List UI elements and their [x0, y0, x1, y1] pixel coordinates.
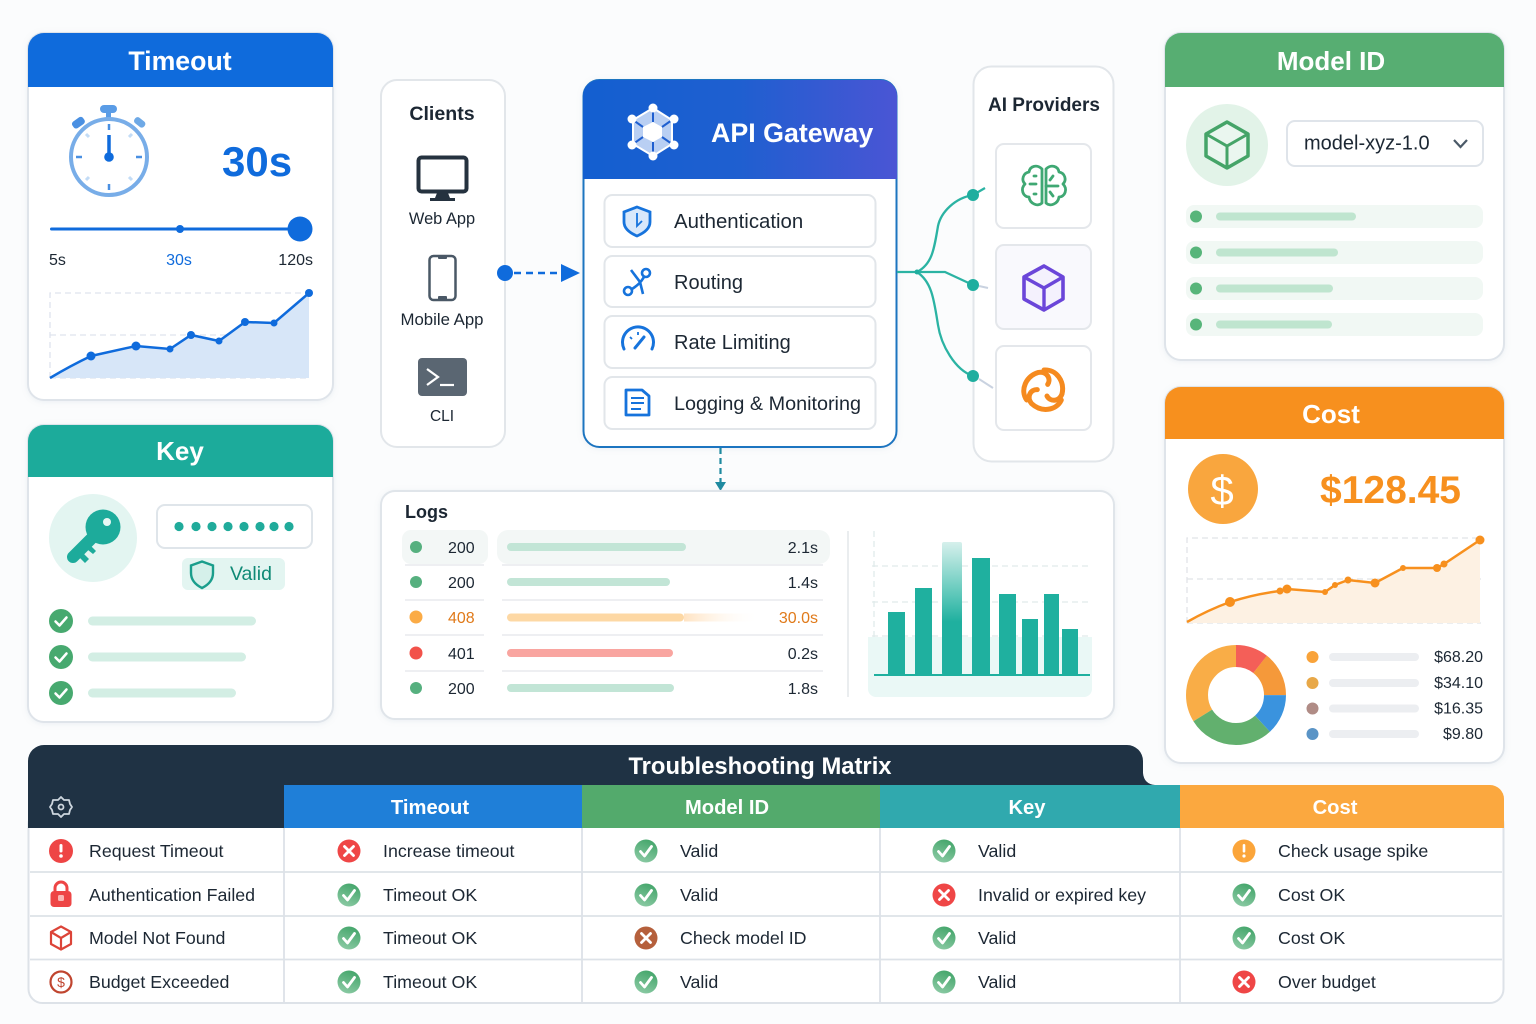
- cost line chart: [1187, 536, 1484, 623]
- log rows: [402, 530, 830, 698]
- logs bar chart: [868, 531, 1092, 697]
- matrix row: authentication failed: Timeout OK: [383, 885, 477, 905]
- log row 2: 1.4s: [788, 575, 818, 592]
- log row 3: [410, 610, 818, 627]
- rate limiting row: Rate Limiting: [674, 332, 791, 354]
- log row 4: 401: [448, 646, 475, 663]
- icon: settings gear: [50, 797, 72, 817]
- cost header: [1165, 387, 1504, 439]
- matrix row: model not found: Model Not Found: [89, 928, 225, 948]
- matrix row: budget exceeded: Timeout OK: [383, 972, 477, 992]
- logs heading: Logs: [405, 502, 448, 522]
- timeout slider: 30s: [166, 252, 192, 269]
- icon: stopwatch: [71, 105, 147, 195]
- model dropdown: [1287, 121, 1483, 166]
- log row 1: [410, 540, 818, 557]
- icon: gateway network: [628, 104, 678, 160]
- log row 5: 200: [448, 681, 475, 698]
- log row 3: 30.0s: [779, 610, 818, 627]
- matrix row: model not found: Timeout OK: [383, 928, 477, 948]
- logging and monitoring row: [604, 377, 876, 429]
- panel: clients: [381, 80, 505, 447]
- timeout header: [28, 33, 333, 87]
- cost legend: [1306, 649, 1483, 743]
- timeout slider: 5s: [49, 252, 66, 269]
- matrix body frame: [28, 810, 1504, 1003]
- timeout header: Timeout: [128, 46, 232, 76]
- provider: brain: [996, 144, 1091, 228]
- matrix row: request timeout: Valid: [680, 841, 718, 861]
- matrix row: budget exceeded: Valid: [978, 972, 1016, 992]
- provider: cube: [996, 245, 1091, 329]
- panel: timeout: [28, 33, 333, 400]
- key checklist: [49, 609, 256, 705]
- icon: web app: Web App: [409, 210, 475, 228]
- icon: mobile app: [400, 256, 484, 329]
- panel: troubleshooting matrix: [28, 745, 1504, 1003]
- timeout slider: 120s: [278, 252, 313, 269]
- rate limiting row: [604, 316, 876, 368]
- gateway header: [583, 80, 897, 179]
- connector: gateway to providers: [897, 188, 993, 388]
- valid badge: [182, 558, 285, 590]
- cost legend: $9.80: [1443, 726, 1483, 743]
- log row 4: 0.2s: [788, 646, 818, 663]
- matrix row: authentication failed: Cost OK: [1278, 885, 1345, 905]
- timeout slider: [49, 216, 313, 269]
- cost value: $128.45: [1320, 469, 1461, 512]
- panel: logs: [381, 491, 1114, 719]
- providers heading: AI Providers: [988, 95, 1100, 116]
- key input field: [157, 505, 312, 548]
- matrix column headers: Cost: [1313, 797, 1358, 819]
- matrix row: request timeout: Request Timeout: [89, 841, 223, 861]
- matrix column headers: Model ID: [685, 797, 769, 819]
- icon: dollar coin: [1188, 454, 1258, 524]
- log row 2: [410, 575, 818, 592]
- matrix column headers: Timeout: [391, 797, 469, 819]
- matrix row: budget exceeded: Over budget: [1278, 972, 1376, 992]
- log row 3: 408: [448, 610, 475, 627]
- arrow: clients to gateway: [497, 264, 580, 282]
- matrix row: budget exceeded: [50, 970, 1376, 994]
- model id header: [1165, 33, 1504, 87]
- matrix row: request timeout: Increase timeout: [383, 841, 515, 861]
- key header: [28, 425, 333, 477]
- matrix row: authentication failed: Invalid or expired key: [978, 885, 1146, 905]
- model list: [1186, 205, 1483, 336]
- matrix row: request timeout: Valid: [978, 841, 1016, 861]
- matrix row: authentication failed: [50, 882, 1345, 907]
- matrix row: request timeout: Check usage spike: [1278, 841, 1428, 861]
- icon: model cube: [1186, 104, 1268, 186]
- valid badge: Valid: [230, 563, 272, 585]
- cost legend: $68.20: [1434, 649, 1483, 666]
- log row 5: 1.8s: [788, 681, 818, 698]
- matrix title bar: [28, 745, 1155, 787]
- matrix row: budget exceeded: Budget Exceeded: [89, 972, 229, 992]
- donut chart: [1197, 656, 1275, 734]
- matrix column headers: Key: [1008, 797, 1046, 819]
- panel: key: [28, 425, 333, 722]
- cost legend: $16.35: [1434, 700, 1483, 718]
- icon: cli: CLI: [430, 408, 454, 425]
- panel: api gateway: [583, 80, 897, 447]
- matrix row: budget exceeded: Valid: [680, 972, 718, 992]
- panel: model id: [1165, 33, 1504, 360]
- matrix row: authentication failed: Authentication Failed: [89, 885, 255, 905]
- authentication row: [604, 195, 876, 247]
- icon: mobile app: Mobile App: [400, 310, 484, 329]
- panel: ai providers: [974, 66, 1114, 462]
- cost header: Cost: [1302, 399, 1360, 429]
- matrix row: model not found: Check model ID: [680, 928, 806, 948]
- matrix row: model not found: Valid: [978, 928, 1016, 948]
- log row 1: 200: [448, 540, 475, 557]
- cost legend: $34.10: [1434, 675, 1483, 692]
- arrow: gateway to logs: [715, 448, 726, 491]
- icon: cli: [418, 358, 467, 425]
- routing row: [604, 256, 876, 307]
- matrix row: request timeout: [49, 839, 1428, 863]
- timeout value: 30s: [222, 138, 292, 185]
- log row 4: [410, 646, 818, 663]
- icon: web app: [409, 158, 475, 228]
- matrix title bar: Troubleshooting Matrix: [628, 753, 892, 780]
- model dropdown: model-xyz-1.0: [1304, 132, 1430, 154]
- authentication row: Authentication: [674, 211, 803, 233]
- clients heading: Clients: [409, 103, 475, 125]
- key header: Key: [156, 436, 204, 466]
- model id header: Model ID: [1277, 46, 1385, 76]
- matrix row: budget exceeded: $: [57, 974, 65, 990]
- log row 2: 200: [448, 575, 475, 592]
- panel: cost: [1165, 387, 1504, 763]
- routing row: Routing: [674, 272, 743, 294]
- gateway header: API Gateway: [711, 118, 873, 148]
- matrix row: model not found: [51, 926, 1345, 950]
- timeout line chart: [50, 289, 313, 378]
- log row 1: 2.1s: [788, 540, 818, 557]
- log row 5: [410, 681, 818, 698]
- matrix row: authentication failed: Valid: [680, 885, 718, 905]
- logging and monitoring row: Logging & Monitoring: [674, 393, 861, 415]
- provider: swirl: [996, 346, 1091, 430]
- matrix column headers: [28, 785, 1504, 828]
- icon: dollar coin: $: [1210, 467, 1234, 514]
- icon: key: [49, 494, 137, 582]
- matrix row: model not found: Cost OK: [1278, 928, 1345, 948]
